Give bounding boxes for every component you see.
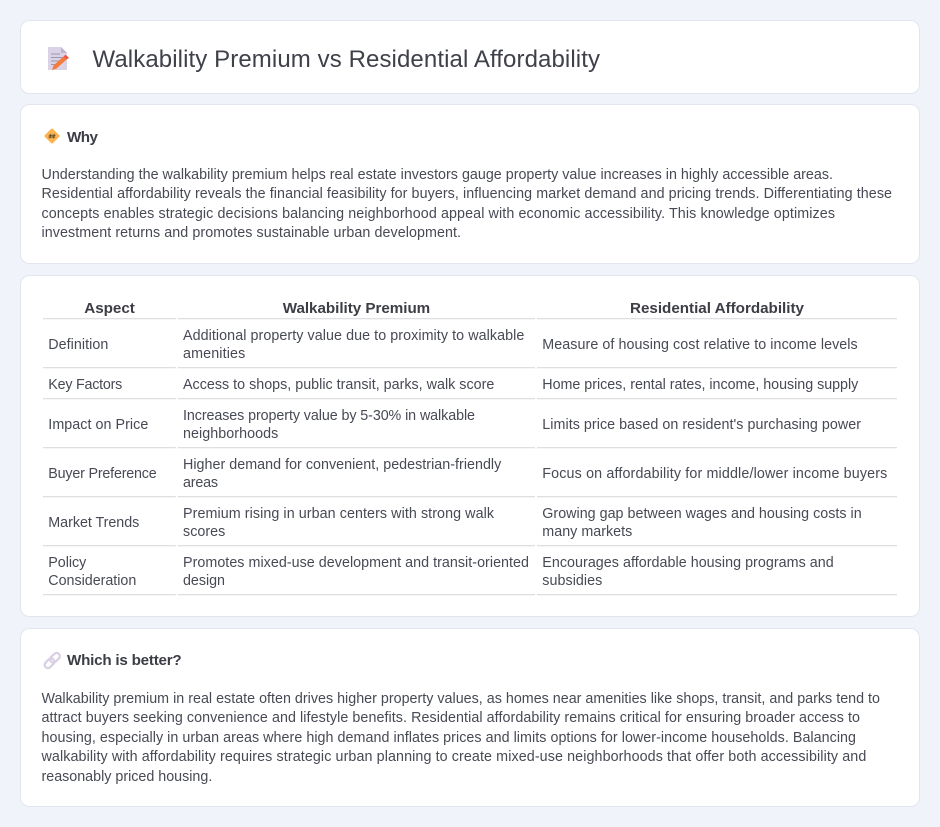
row: policy consideration: subsidies	[542, 573, 602, 589]
panel: comparison table	[20, 276, 920, 616]
row: policy consideration: Consideration	[48, 573, 136, 589]
paragraph: which is better: attract buyers seeking convenience and lifestyle benefits. Residential affordability remains critical for ensuring broader access to	[42, 710, 860, 726]
table header row: Residential Affordability	[630, 300, 805, 317]
paragraph: why	[42, 167, 892, 241]
paragraph: why: concepts enables strategic decisions balancing neighborhood appeal with economic accessibility. This knowledge optimizes	[42, 206, 835, 222]
row: definition	[43, 328, 897, 368]
icon: orange diamond sign	[44, 128, 60, 144]
heading: which is better: Which is better?	[67, 652, 182, 669]
paragraph: which is better: reasonably priced housing.	[42, 769, 212, 785]
icon: chain link	[43, 652, 61, 669]
row: market trends	[43, 506, 897, 546]
row: impact on price: neighborhoods	[183, 426, 278, 442]
panel: header	[20, 20, 920, 94]
title: Walkability Premium vs Residential Affordability	[92, 46, 600, 73]
panel: which is better	[20, 628, 920, 806]
panel: why	[20, 104, 920, 264]
row: market trends: Premium rising in urban centers with strong walk	[183, 506, 495, 522]
icon: document with pencil	[48, 47, 69, 70]
row: policy consideration	[43, 555, 897, 595]
row: key factors: Access to shops, public transit, parks, walk score	[183, 377, 494, 393]
paragraph: which is better: housing, especially in urban areas where high demand inflates prices and limits options for lower-income households. Balancing	[42, 730, 856, 746]
row: definition: Measure of housing cost relative to income levels	[542, 337, 858, 353]
row: impact on price: Increases property value by 5-30% in walkable	[183, 408, 475, 424]
row: key factors: Key Factors	[48, 377, 122, 393]
row: policy consideration: Encourages affordable housing programs and	[542, 555, 834, 571]
paragraph: which is better	[40, 691, 880, 785]
paragraph: why: investment returns and promotes sustainable urban development.	[42, 225, 461, 241]
row: definition: Additional property value due to proximity to walkable	[183, 328, 524, 344]
paragraph: why: Residential affordability reveals the financial feasibility for buyers, influencing market demand and pricing trends. Differentiating these	[42, 186, 892, 202]
row: key factors	[43, 377, 897, 399]
table header row	[43, 300, 897, 319]
row: definition: Definition	[48, 337, 108, 353]
row: key factors: Home prices, rental rates, income, housing supply	[542, 377, 859, 393]
heading: why: Why	[67, 129, 99, 146]
row: market trends: Market Trends	[48, 515, 139, 531]
row: market trends: Growing gap between wages and housing costs in	[542, 506, 862, 522]
row: impact on price: Limits price based on resident's purchasing power	[542, 417, 861, 433]
paragraph: which is better: walkability with affordability requires strategic urban planning to create mixed-use neighborhoods that offer both accessibility and	[40, 749, 866, 765]
row: definition: amenities	[183, 346, 245, 362]
row: buyer preference	[43, 457, 897, 497]
row: policy consideration: Promotes mixed-use development and transit-oriented	[183, 555, 529, 571]
row: policy consideration: Policy	[48, 555, 87, 571]
row: impact on price: Impact on Price	[48, 417, 148, 433]
table header row: Walkability Premium	[283, 300, 430, 317]
row: market trends: many markets	[542, 524, 632, 540]
row: buyer preference: Focus on affordability for middle/lower income buyers	[542, 466, 887, 482]
row: market trends: scores	[183, 524, 225, 540]
row: buyer preference: Buyer Preference	[48, 466, 157, 482]
paragraph: which is better: Walkability premium in real estate often drives higher property values, as homes near amenities like shops, transit, and parks tend to	[42, 691, 880, 707]
row: impact on price	[43, 408, 897, 448]
row: buyer preference: areas	[183, 475, 218, 491]
row: buyer preference: Higher demand for convenient, pedestrian-friendly	[183, 457, 502, 473]
table header row: Aspect	[84, 300, 135, 317]
row: policy consideration: design	[183, 573, 225, 589]
paragraph: why: Understanding the walkability premium helps real estate investors gauge property value increases in highly accessible areas.	[42, 167, 833, 183]
